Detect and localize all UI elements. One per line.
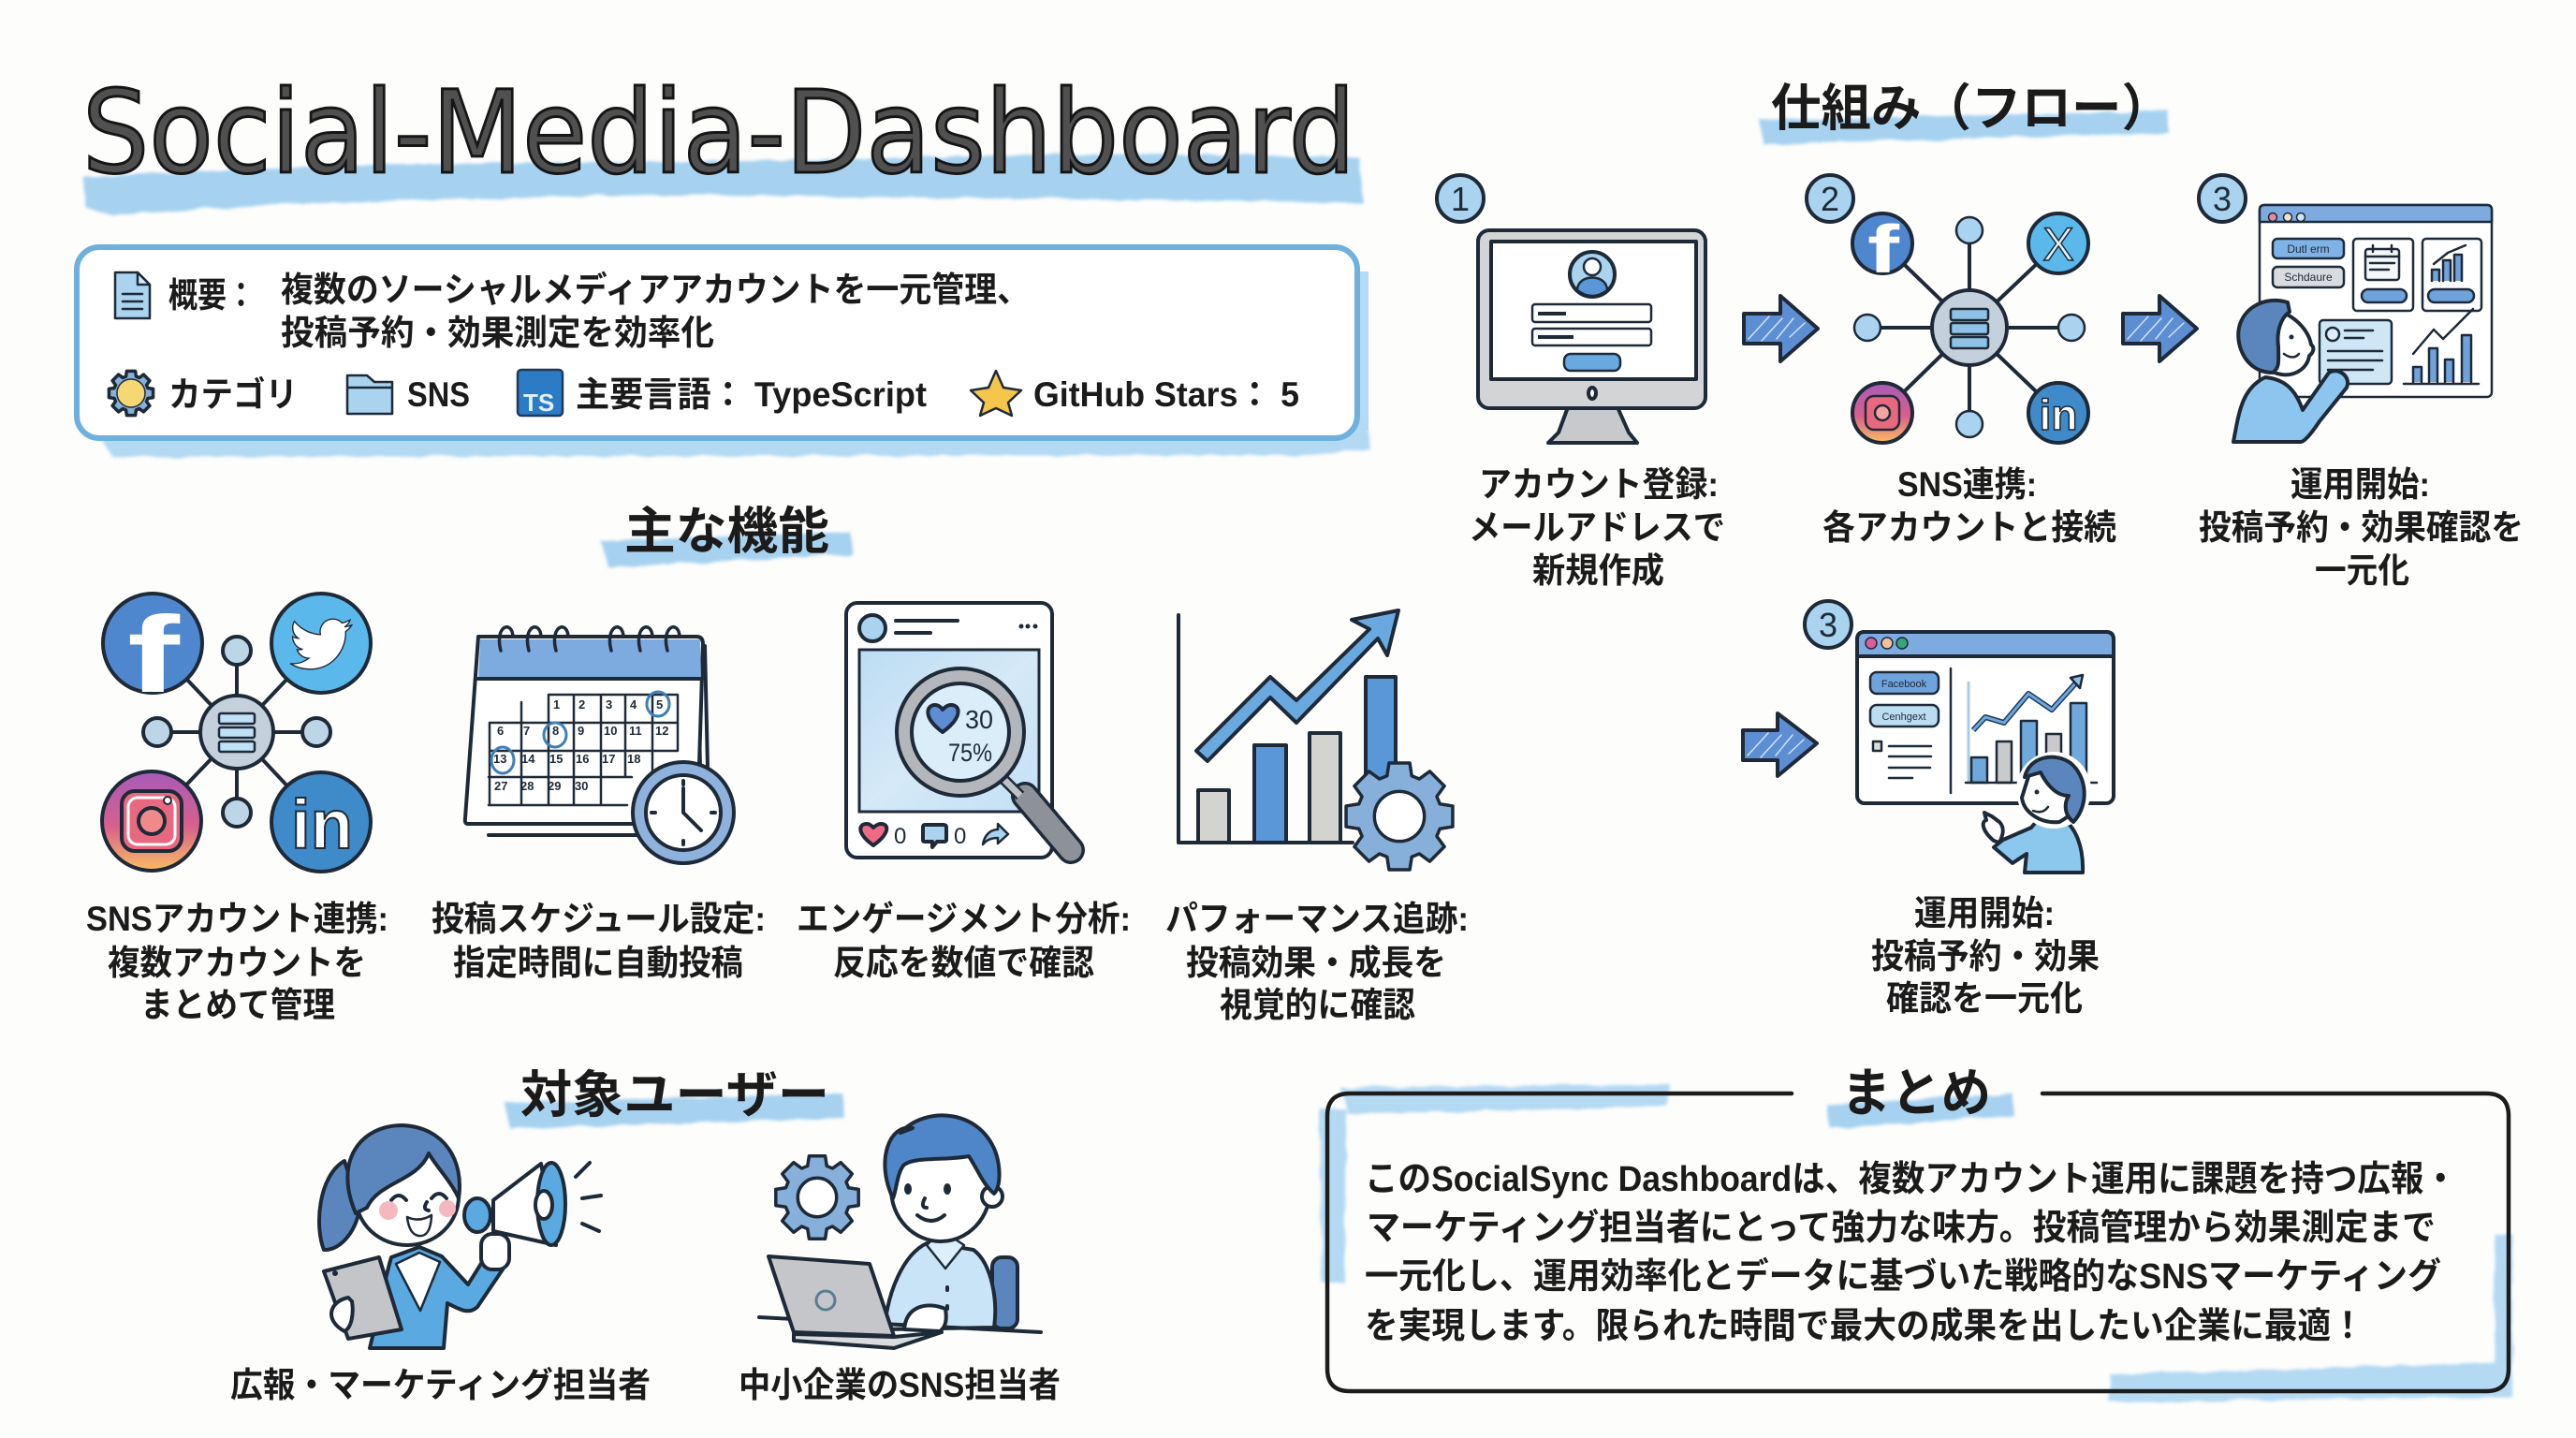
language: 主要言語： TypeScript — [576, 375, 927, 414]
step text — [2199, 465, 2524, 590]
overview label: 概要： — [168, 276, 256, 315]
calendar: 17 — [602, 752, 615, 766]
post card — [846, 603, 1052, 858]
flow step 3: start operation — [2199, 175, 2524, 590]
step text: 投稿予約・効果確認を — [2199, 508, 2524, 547]
calendar: 3 — [606, 697, 612, 712]
icon: linkedin: in — [2040, 390, 2077, 439]
calendar: 10 — [604, 724, 617, 738]
calendar: 30 — [575, 779, 588, 793]
calendar: 9 — [578, 724, 584, 738]
calendar: 18 — [627, 752, 640, 766]
audience label: 中小企業のSNS担当者 — [739, 1366, 1061, 1404]
feature text — [1165, 900, 1469, 1024]
icon: gear — [1346, 763, 1453, 870]
heading brush: audience — [505, 1093, 844, 1129]
post card: 0 — [894, 824, 906, 849]
step number 2: 2 — [1821, 180, 1839, 218]
illustration: person pointing — [2233, 301, 2348, 442]
feature text: エンゲージメント分析: — [797, 900, 1131, 938]
icon: linkedin — [271, 772, 371, 872]
feature text: 指定時間に自動投稿 — [453, 944, 743, 982]
calendar: 15 — [549, 752, 563, 766]
step number 3 — [2199, 175, 2246, 222]
icon: facebook: f — [127, 594, 181, 715]
heading brush — [1827, 1093, 2014, 1128]
calendar: 28 — [520, 779, 534, 793]
audience label: 広報・マーケティング担当者 — [230, 1366, 651, 1404]
calendar: 4 — [630, 697, 637, 712]
heading brush: features — [601, 532, 852, 567]
summary text: 一元化し、運用効率化とデータに基づいた戦略的なSNSマーケティング — [1365, 1256, 2441, 1297]
hub network — [143, 637, 330, 827]
illustration: woman with megaphone — [319, 1125, 601, 1348]
illustration: man with laptop — [759, 1115, 1041, 1348]
feature: performance tracking — [1165, 610, 1469, 1024]
calendar: 16 — [576, 752, 589, 766]
feature text: 視覚的に確認 — [1220, 986, 1415, 1024]
flow step 1: account registration — [1437, 175, 1725, 590]
feature text — [797, 900, 1131, 982]
summary text: このSocialSync Dashboardは、複数アカウント運用に課題を持つ広報・ — [1365, 1160, 2457, 1199]
icon: magnifier — [897, 668, 1071, 850]
feature text: 反応を数値で確認 — [833, 944, 1094, 982]
step number 3: 3 — [2213, 180, 2232, 218]
calendar: 5 — [656, 697, 663, 712]
step text: メールアドレスで — [1469, 508, 1725, 547]
overview text: 投稿予約・効果測定を効率化 — [281, 314, 714, 352]
icon: magnifier: 75% — [948, 739, 992, 767]
feature text: 投稿効果・成長を — [1186, 944, 1446, 982]
heading: flow: 仕組み（フロー） — [1771, 81, 2172, 137]
arrow — [1744, 296, 1818, 361]
step text: SNS連携: — [1897, 465, 2037, 504]
heading: summary: まとめ — [1841, 1064, 1991, 1123]
icon: X — [2028, 213, 2088, 273]
post card: 0 — [954, 824, 966, 849]
step text: 運用開始: — [1914, 894, 2055, 932]
panel: overview — [77, 247, 1370, 457]
icon: twitter — [271, 594, 371, 693]
dashboard window: Schdaure — [2284, 271, 2333, 284]
step number 1 — [1437, 175, 1484, 222]
step text — [1469, 465, 1725, 590]
heading brush: flow — [1760, 110, 2170, 144]
summary text — [1365, 1160, 2457, 1346]
icon: instagram — [1852, 383, 1912, 443]
icon: magnifier: 30 — [965, 705, 993, 734]
step text: 各アカウントと接続 — [1822, 508, 2116, 547]
calendar: 6 — [497, 724, 504, 738]
step text: 一元化 — [2315, 551, 2409, 590]
audience: SME SNS manager — [739, 1115, 1061, 1404]
calendar: 29 — [548, 779, 561, 793]
step text: 運用開始: — [2291, 465, 2430, 504]
title: Social-Media-Dashboard — [82, 66, 1355, 199]
calendar: 13 — [493, 752, 506, 766]
feature: SNS account link — [86, 594, 388, 1024]
step number 2 — [1807, 175, 1853, 222]
icon: TypeScript: TS — [523, 389, 554, 417]
icon: TypeScript — [518, 370, 563, 417]
feature text: 投稿スケジュール設定: — [432, 900, 766, 938]
step number 3: 3 — [1819, 606, 1837, 644]
dashboard window: Dutl erm — [2287, 242, 2330, 256]
category label: カテゴリ — [168, 374, 298, 414]
summary text: マーケティング担当者にとって強力な味方。投稿管理から効果測定まで — [1367, 1209, 2436, 1248]
calendar: 7 — [523, 724, 530, 738]
overview text — [281, 270, 1030, 352]
icon: linkedin — [2028, 383, 2088, 443]
step text: 確認を一元化 — [1886, 979, 2083, 1018]
audience: PR marketing — [230, 1125, 651, 1404]
step text: 投稿予約・効果 — [1871, 937, 2100, 976]
icon: folder — [347, 375, 392, 414]
feature: engagement analysis — [797, 603, 1131, 982]
calendar: 8 — [552, 724, 559, 738]
icon: X: X — [2042, 218, 2074, 271]
dashboard window — [2260, 205, 2492, 397]
icon: star — [971, 371, 1021, 416]
heading: features: 主な機能 — [624, 504, 829, 560]
calendar: 27 — [494, 779, 507, 793]
feature text: パフォーマンス追跡: — [1165, 900, 1469, 938]
calendar: 1 — [553, 697, 560, 712]
step number 3 — [1805, 601, 1852, 648]
panel frame — [77, 247, 1357, 438]
illustration: person pointing — [1983, 756, 2086, 873]
feature: post scheduling — [432, 627, 766, 982]
summary frame — [1327, 1093, 2509, 1391]
step text: 新規作成 — [1532, 551, 1664, 590]
icon: facebook: f — [1867, 213, 1900, 287]
arrow — [1743, 713, 1817, 776]
icon: monitor with login form — [1478, 230, 1705, 443]
network diagram — [1854, 217, 2085, 437]
dashboard window: Cenhgext — [1881, 712, 1926, 723]
bar chart — [1178, 615, 1396, 843]
heading: audience: 対象ユーザー — [520, 1067, 829, 1123]
step text — [1822, 465, 2116, 547]
step number 1: 1 — [1451, 180, 1470, 218]
icon: facebook — [1852, 213, 1912, 287]
icon: instagram — [102, 771, 201, 871]
step text: アカウント登録: — [1479, 465, 1719, 504]
icon: clock — [633, 762, 734, 863]
feature text: まとめて管理 — [140, 986, 335, 1024]
flow step 4: start operation — [1805, 601, 2114, 1018]
dashboard window: Facebook — [1881, 679, 1927, 690]
feature text — [432, 900, 766, 982]
feature text — [86, 900, 388, 1024]
calendar: 2 — [578, 697, 585, 712]
flow step 2: SNS connection — [1807, 175, 2116, 547]
dashboard window — [1857, 632, 2114, 803]
calendar: 14 — [521, 752, 535, 766]
calendar: 12 — [655, 724, 668, 738]
calendar: 11 — [629, 724, 642, 738]
summary text: を実現します。限られた時間で最大の成果を出したい企業に最適！ — [1365, 1307, 2364, 1346]
overview text: 複数のソーシャルメディアアカウントを一元管理、 — [281, 270, 1030, 309]
feature text: 複数アカウントを — [108, 944, 366, 982]
step text — [1871, 894, 2100, 1018]
feature text: SNSアカウント連携: — [86, 900, 388, 938]
trend arrow — [1196, 610, 1398, 761]
panel: summary — [1320, 1064, 2512, 1402]
arrow — [2123, 296, 2197, 361]
icon: facebook — [103, 594, 202, 715]
corner brushes — [1320, 1084, 2512, 1402]
title underline brush — [82, 154, 1363, 215]
github stars: GitHub Stars： 5 — [1033, 375, 1299, 414]
panel shadow brush — [97, 429, 1370, 457]
icon: linkedin: in — [291, 785, 353, 863]
calendar — [465, 627, 708, 835]
category value: SNS — [407, 375, 470, 414]
icon: document — [115, 272, 150, 318]
icon: category gear — [109, 371, 154, 416]
